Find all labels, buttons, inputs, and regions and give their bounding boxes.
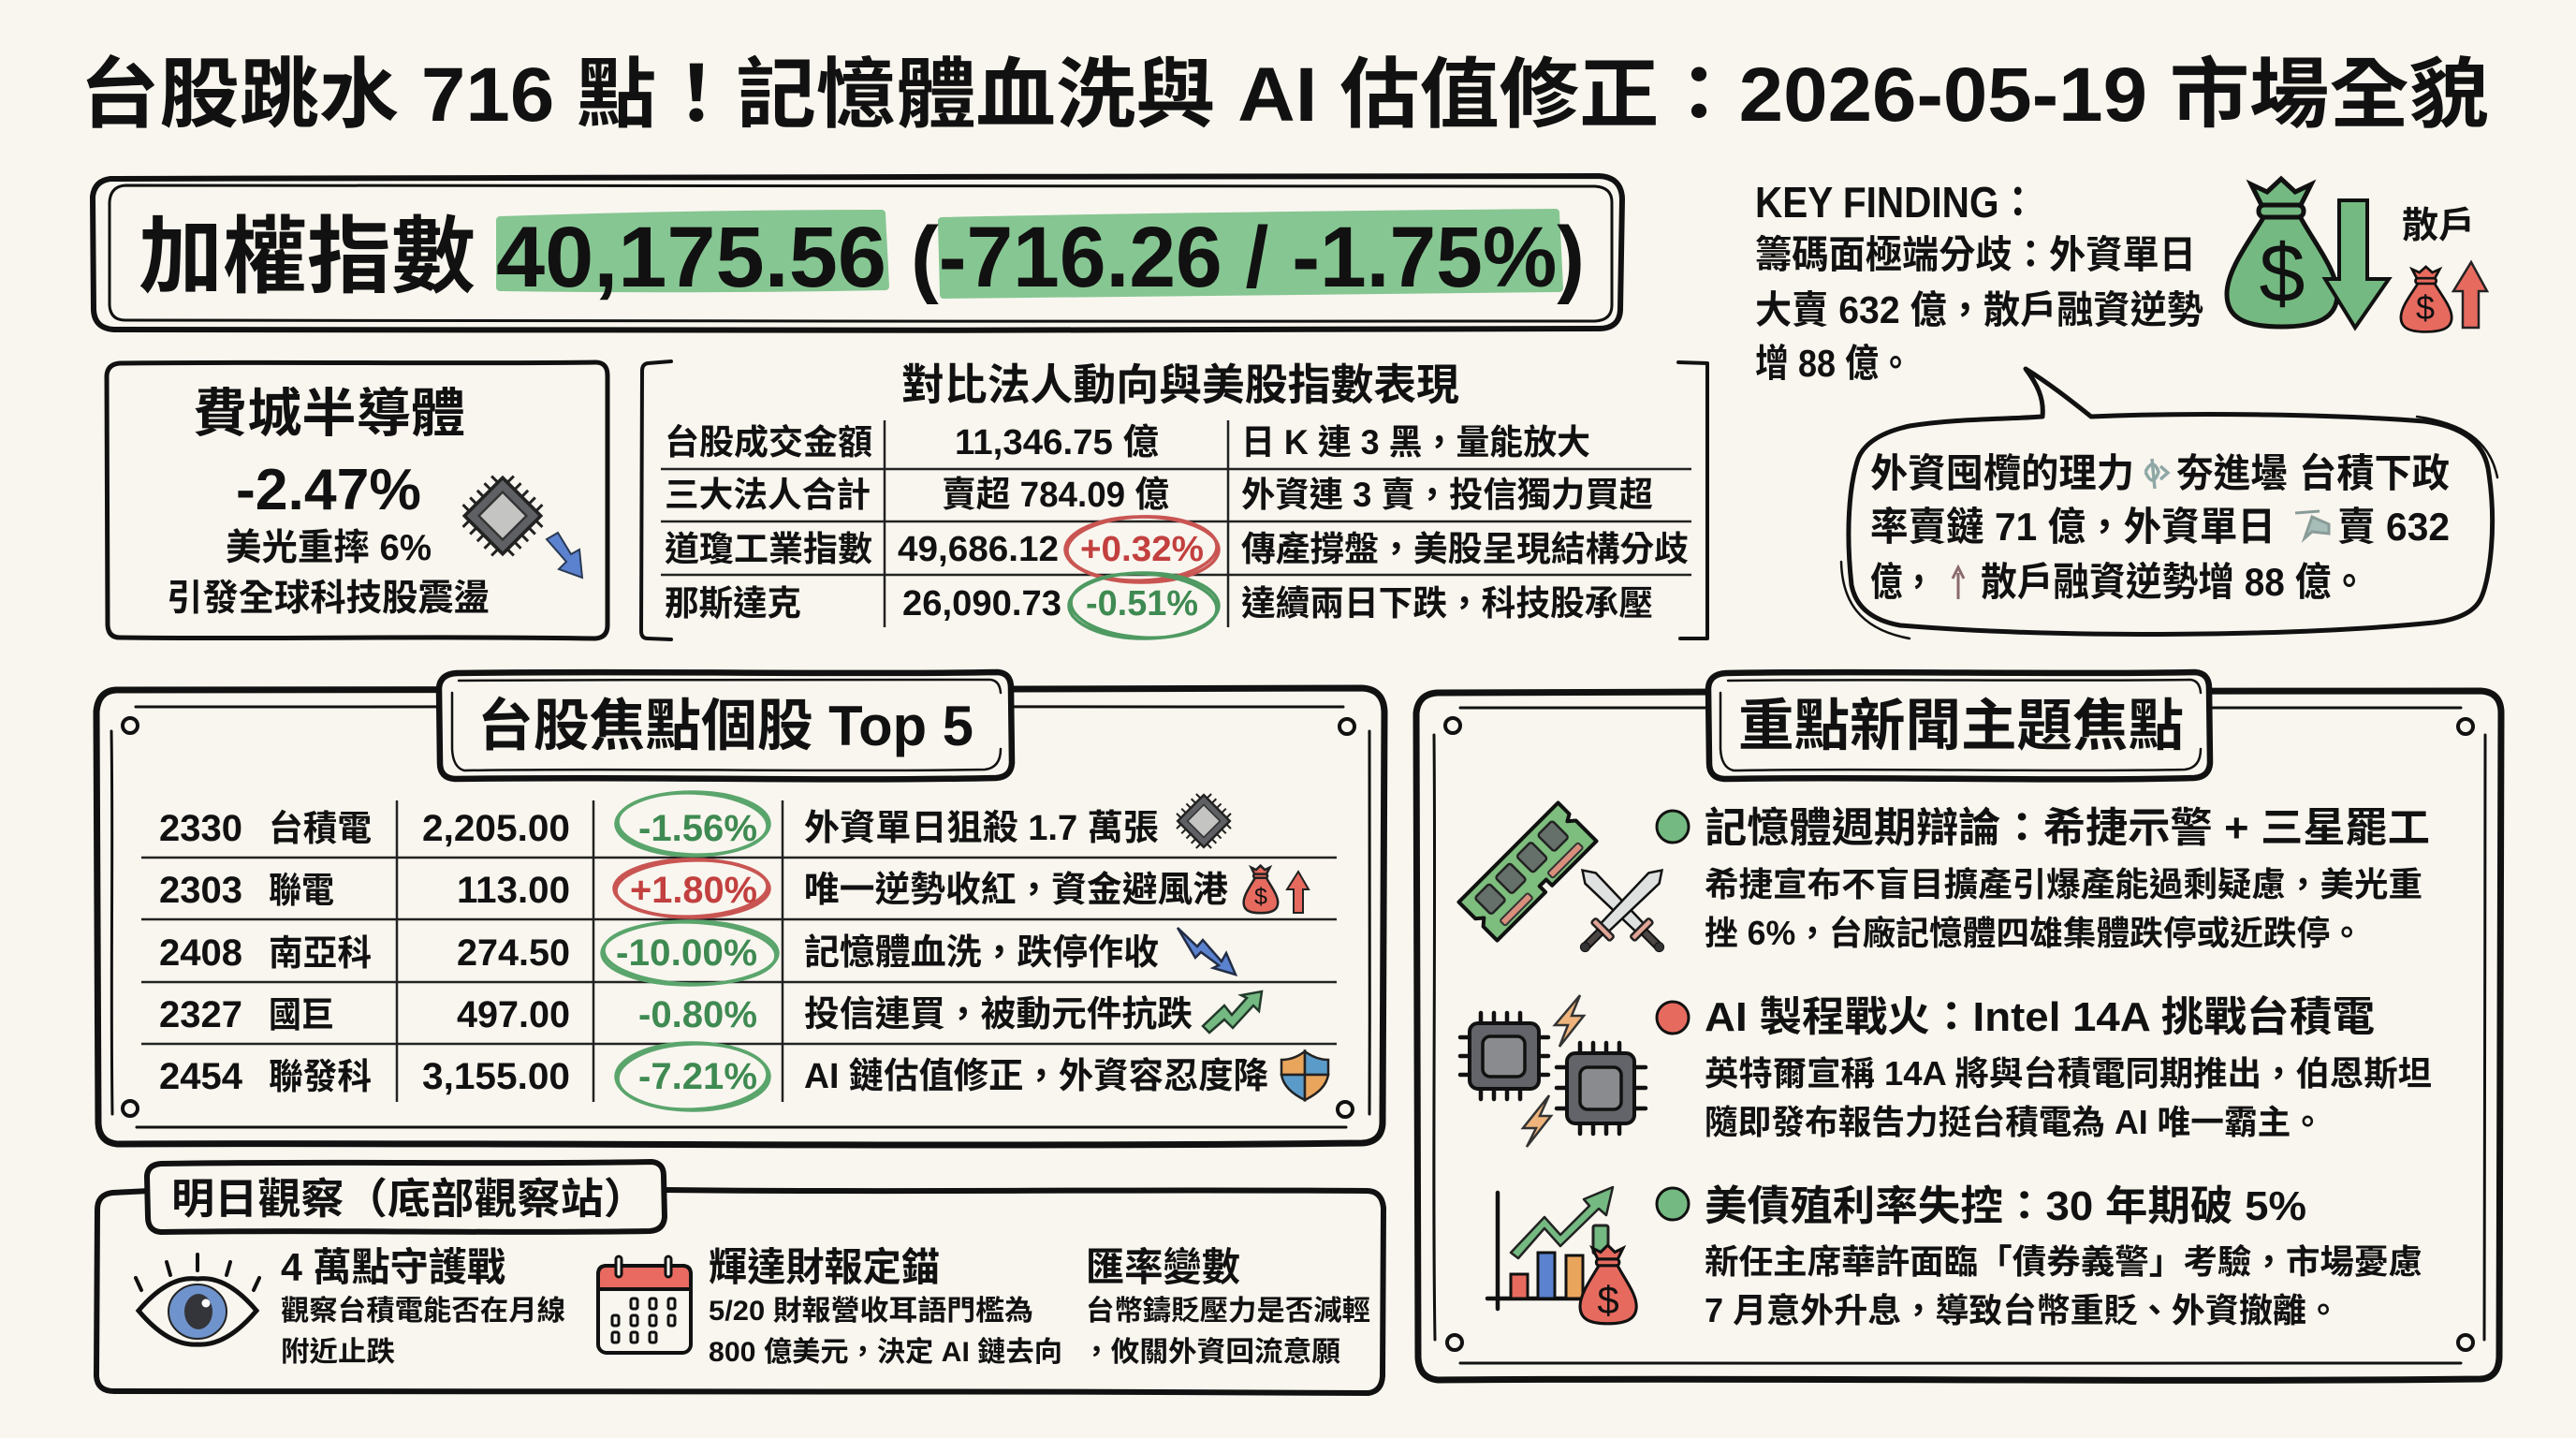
row: Nasdaq: 那斯達克 <box>665 584 801 623</box>
news item 2: 隨即發布報告力挺台積電為 AI 唯一霸主。 <box>1705 1103 2324 1141</box>
icon: calendar <box>598 1256 691 1353</box>
row: 2408: 274.50 <box>457 932 570 974</box>
bubble line 3: 散戶融資逆勢增 88 億。 <box>1981 560 2367 604</box>
icon: foreign capital outflow: $ <box>2260 227 2305 319</box>
row: 2327: 2327 <box>159 994 242 1035</box>
bubble line 2: 率賣鐽 71 億，外資單日 <box>1870 505 2276 549</box>
note line 2: 引發全球科技股震盪 <box>167 579 490 619</box>
row: 2454: 2454 <box>159 1056 243 1097</box>
green circle 1 <box>616 790 769 858</box>
title: 台股跳水 716 點！記憶體血洗與 AI 估值修正：2026-05-19 市場全貌 <box>80 52 2489 138</box>
row: institutions: 三大法人合計 <box>665 476 871 514</box>
key finding text: 增 88 億。 <box>1755 342 1912 385</box>
row: 2330 <box>159 786 1238 856</box>
bubble line 2: 賣 632 <box>2337 505 2450 549</box>
red circle <box>614 858 769 919</box>
note line 1: 美光重摔 6% <box>226 528 432 568</box>
table heading: 對比法人動向與美股指數表現 <box>901 360 1459 409</box>
icon: foreign capital outflow <box>2227 179 2389 328</box>
row: Dow <box>665 530 1689 569</box>
row: institutions: 賣超 784.09 億 <box>942 476 1169 515</box>
row: 2303: 113.00 <box>457 870 570 911</box>
watch item 2: 800 億美元，決定 AI 鏈去向 <box>709 1337 1062 1368</box>
row: Nasdaq: -0.51% <box>1086 584 1198 624</box>
news item 3: 新任主席華許面臨「債券義警」考驗，市場憂慮 <box>1705 1242 2422 1281</box>
row: 2303: $ <box>1254 884 1267 910</box>
percent change: -2.47% <box>236 458 421 522</box>
row: 2327: 國巨 <box>269 996 334 1035</box>
panel tab: 重點新聞主題焦點 <box>1738 695 2184 757</box>
panel: tomorrow's watch <box>96 1162 1383 1393</box>
watch item 1: 4 萬點守護戰 <box>281 1245 505 1289</box>
icon: retail inflow <box>2401 262 2487 331</box>
row: turnover: 台股成交金額 <box>665 423 872 462</box>
news item 1: 記憶體週期辯論：希捷示警 + 三星罷工 <box>1705 805 2430 851</box>
row: institutions: 外資連 3 賣，投信獨力買超 <box>1241 476 1653 514</box>
row: 2303: 唯一逆勢收紅，資金避風港 <box>804 871 1228 910</box>
watch item 3: 匯率變數 <box>1086 1245 1240 1289</box>
news item 2: 英特爾宣稱 14A 將與台積電同期推出，伯恩斯坦 <box>1705 1054 2432 1093</box>
panel: key news themes <box>1416 672 2501 1380</box>
row: Nasdaq <box>665 584 1653 624</box>
retail label: 散戶 <box>2402 206 2475 246</box>
watch item 2: 5/20 財報營收耳語門檻為 <box>709 1296 1033 1327</box>
icon: retail inflow: $ <box>2416 288 2435 327</box>
panel: institutional flows and US indexes <box>641 360 1707 641</box>
panel: index headline <box>93 176 1622 330</box>
icon: blue down arrow <box>547 533 582 578</box>
news item 1 <box>1657 805 2430 952</box>
key finding text: KEY FINDING： <box>1755 178 2037 227</box>
green circle 2 <box>602 919 778 987</box>
watch item 3: ，攸關外資回流意願 <box>1082 1337 1340 1368</box>
row: 2327 <box>159 991 1262 1035</box>
panel tab <box>439 672 1012 779</box>
red circle <box>1065 514 1219 583</box>
news item 3: 7 月意外升息，導致台幣重貶、外資撤離。 <box>1705 1291 2340 1329</box>
watch item 1: 觀察台積電能否在月線 <box>281 1295 565 1327</box>
index value: 40,175.56 <box>496 210 886 305</box>
highlight: index value <box>500 213 886 288</box>
heading: 費城半導體 <box>193 384 465 443</box>
bubble line 1 <box>1870 451 2450 495</box>
panel tab: 明日觀察（底部觀察站） <box>171 1175 647 1223</box>
row: 2330: 台積電 <box>269 810 372 849</box>
watch item 1: 附近止跌 <box>281 1337 395 1368</box>
icon: chip <box>452 465 553 566</box>
row: 2454 <box>159 1051 1328 1100</box>
news item 3: 美債殖利率失控：30 年期破 5% <box>1705 1183 2306 1229</box>
icon: shield <box>1281 1051 1328 1100</box>
row: 2408 <box>159 928 1236 975</box>
key finding text <box>1755 178 2203 385</box>
news item 1: 希捷宣布不盲目擴產引爆產能過剩疑慮，美光重 <box>1705 865 2422 903</box>
row: Dow: +0.32% <box>1080 530 1204 569</box>
bubble line 1: 外資囤欖的理力 <box>1870 451 2134 495</box>
row: turnover: 日 K 連 3 黑，量能放大 <box>1241 423 1590 462</box>
bubble line 1: 夯進壜 <box>2176 451 2288 495</box>
news item 3 <box>1657 1183 2422 1329</box>
row: 2330: -1.56% <box>638 808 757 849</box>
green circle <box>1069 570 1219 641</box>
row: turnover: 11,346.75 億 <box>955 423 1159 462</box>
panel tab <box>1708 672 2210 779</box>
bubble line 1: 台積下政 <box>2299 451 2450 495</box>
bubble line 3: 億， <box>1870 560 1935 604</box>
row: 2454: -7.21% <box>638 1056 757 1097</box>
row: 2330: 2,205.00 <box>422 808 570 849</box>
news item 1: 挫 6%，台廠記憶體四雄集體跌停或近跌停。 <box>1705 914 2364 952</box>
news item 2: AI 製程戰火：Intel 14A 挑戰台積電 <box>1705 994 2375 1040</box>
row: 2327: -0.80% <box>638 994 757 1035</box>
row: Nasdaq: 達續兩日下跌，科技股承壓 <box>1241 584 1653 623</box>
icon: crossed swords <box>1573 861 1672 960</box>
row: turnover <box>665 423 1590 462</box>
highlight: index change <box>942 213 1559 295</box>
row: 2303: 2303 <box>159 870 242 911</box>
row: Dow: 49,686.12 <box>898 530 1059 569</box>
row: 2408: -10.00% <box>616 932 757 974</box>
news item 2 <box>1657 994 2432 1141</box>
row: 2454: AI 鏈估值修正，外資容忍度降 <box>804 1057 1268 1096</box>
icon: competing chips <box>1460 995 1646 1147</box>
row: 2330: 2330 <box>159 808 242 849</box>
row: 2330: 外資單日狙殺 1.7 萬張 <box>804 809 1159 848</box>
icon: memory module <box>1458 802 1597 941</box>
row: 2408: 記憶體血洗，跌停作收 <box>804 933 1159 973</box>
panel tab: 台股焦點個股 Top 5 <box>477 695 973 757</box>
key finding text: 大賣 632 億，散戶融資逆勢 <box>1755 288 2203 331</box>
icon: yield chart with money bag <box>1487 1187 1636 1324</box>
panel tab <box>147 1162 665 1232</box>
key finding text: 籌碼面極端分歧：外資單日 <box>1755 233 2196 276</box>
row: Nasdaq: 26,090.73 <box>902 584 1061 624</box>
row: 2303: +1.80% <box>630 870 757 911</box>
index change: (-716.26 / -1.75%) <box>911 210 1585 305</box>
icon: eye <box>136 1255 259 1344</box>
row: 2454: 聯發科 <box>269 1058 372 1097</box>
row: 2303: 聯電 <box>269 872 334 911</box>
row: 2327: 投信連買，被動元件抗跌 <box>804 995 1193 1034</box>
index label: 加權指數 <box>139 211 476 304</box>
green circle 3 <box>616 1041 769 1112</box>
row: institutions <box>665 476 1653 515</box>
watch item 2 <box>709 1245 1062 1368</box>
row: Dow: 傳產撐盤，美股呈現結構分歧 <box>1241 530 1689 568</box>
panel: Top 5 stocks <box>96 672 1384 1145</box>
speech bubble <box>1841 369 2497 638</box>
panel: Philadelphia semiconductor <box>107 362 607 638</box>
icon: yield chart with money bag: $ <box>1597 1278 1619 1322</box>
watch item 3 <box>1082 1245 1370 1368</box>
watch item 1 <box>281 1245 565 1368</box>
row: 2454: 3,155.00 <box>422 1056 570 1097</box>
row: 2408: 南亞科 <box>269 934 372 974</box>
row: 2327: 497.00 <box>457 994 570 1035</box>
row: 2303 <box>159 866 1309 913</box>
watch item 3: 台幣鑄貶壓力是否減輕 <box>1086 1295 1370 1327</box>
row: Dow: 道瓊工業指數 <box>665 530 872 568</box>
watch item 2: 輝達財報定錨 <box>709 1245 940 1289</box>
row: 2408: 2408 <box>159 932 242 974</box>
